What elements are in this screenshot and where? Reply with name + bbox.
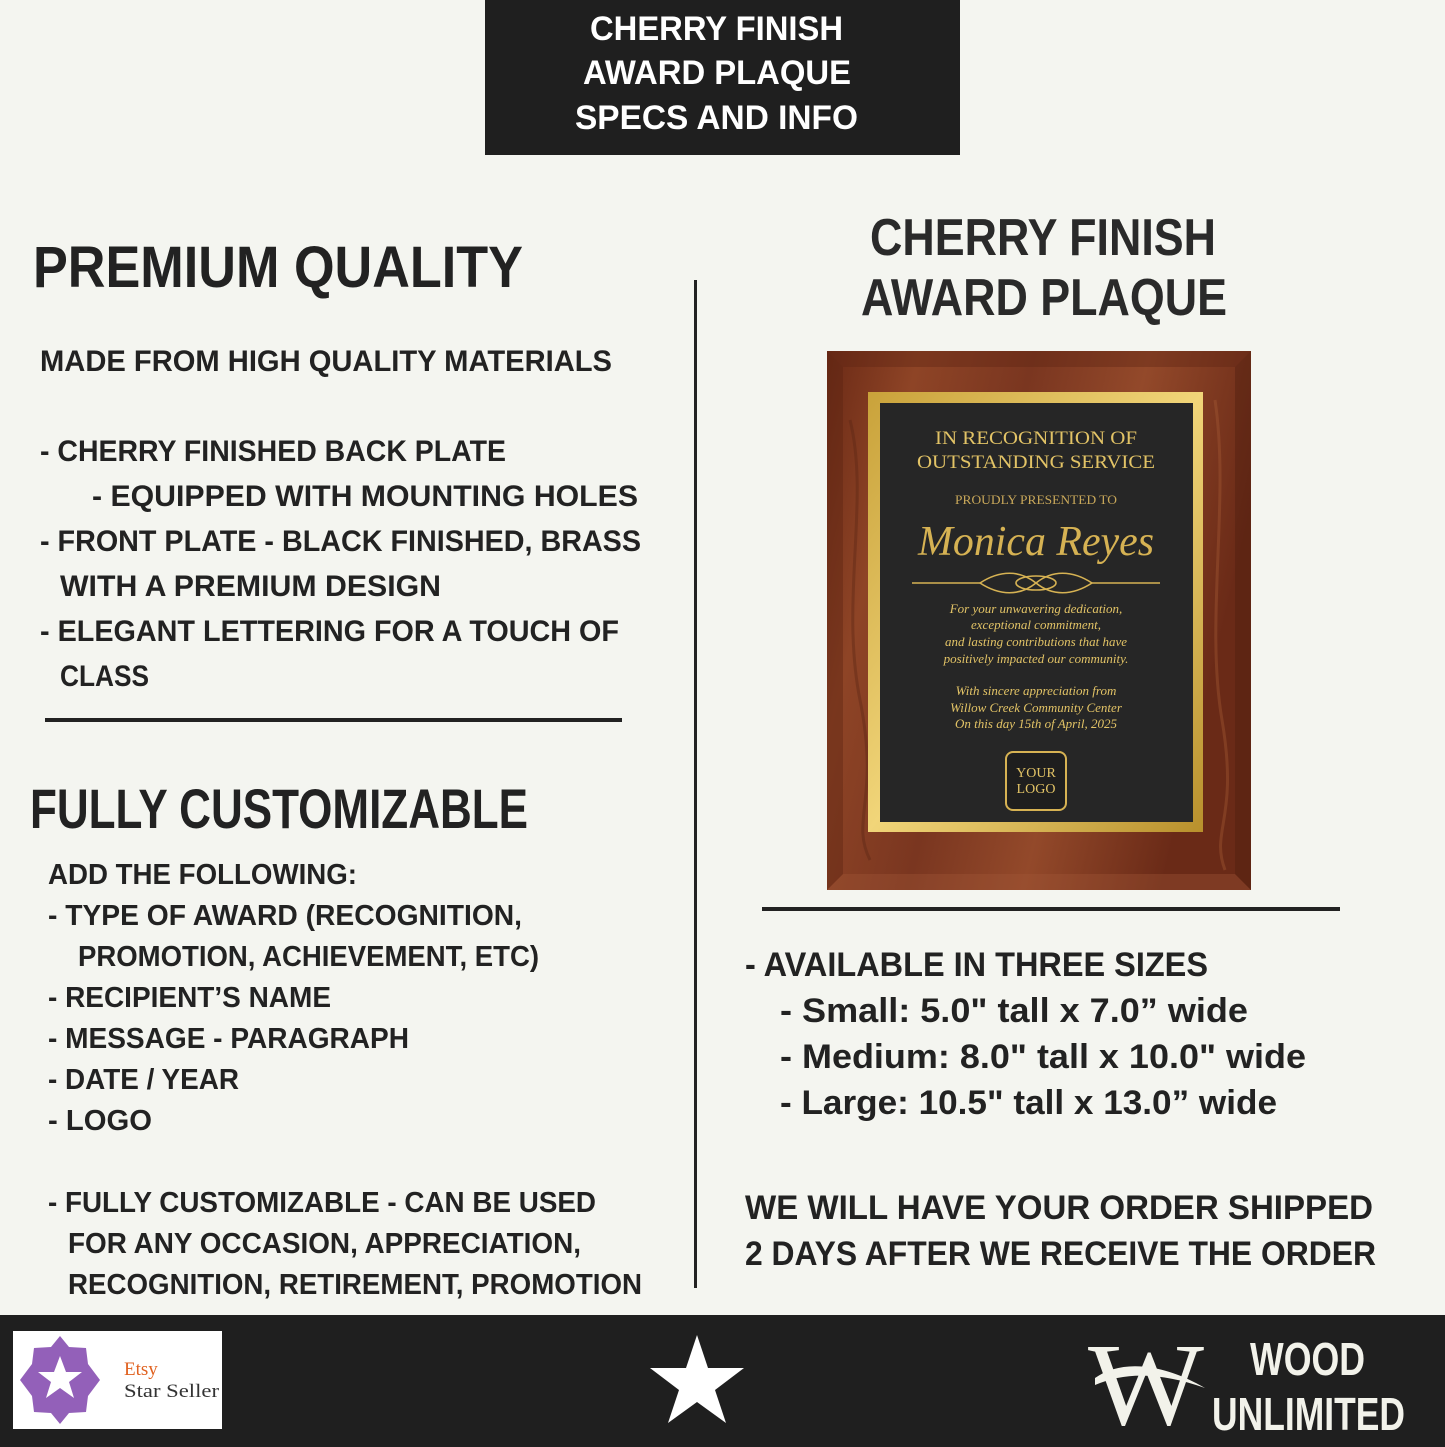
text block: premium quality list: - FRONT PLATE - BLACK FINISHED, BRASS (40, 525, 641, 558)
logo: wood unlimited: WOOD (1250, 1333, 1365, 1385)
text block: shipping: WE WILL HAVE YOUR ORDER SHIPPED (745, 1189, 1373, 1227)
text block: customization list: ADD THE FOLLOWING: (48, 859, 357, 891)
plaque image: PROUDLY PRESENTED TO (955, 492, 1117, 507)
text block: customization list: - LOGO (48, 1105, 152, 1137)
plaque image (827, 351, 1251, 890)
icon: star (650, 1335, 744, 1423)
plaque image: Willow Creek Community Center (950, 700, 1123, 715)
plaque image: and lasting contributions that have (945, 634, 1127, 649)
footer (0, 1315, 1445, 1447)
logo: wood unlimited: W (1088, 1319, 1205, 1447)
text block: premium quality list: CLASS (60, 660, 149, 693)
heading: fully customizable: FULLY CUSTOMIZABLE (30, 777, 528, 840)
text block: sizes: - AVAILABLE IN THREE SIZES (745, 946, 1208, 984)
text block: premium quality list: MADE FROM HIGH QUALITY MATERIALS (40, 345, 612, 378)
text block: sizes: - Large: 10.5" tall x 13.0” wide (780, 1084, 1277, 1122)
plaque image: YOUR (1016, 766, 1056, 781)
text block: shipping (745, 1189, 1376, 1273)
heading: product name (861, 209, 1227, 327)
text block: customization list: - TYPE OF AWARD (RECOGNITION, (48, 900, 522, 932)
text block: premium quality list: - ELEGANT LETTERING FOR A TOUCH OF (40, 615, 619, 648)
text block: premium quality list: - EQUIPPED WITH MOUNTING HOLES (92, 480, 638, 513)
badge: etsy star seller: Star Seller (124, 1381, 220, 1402)
text block: shipping: 2 DAYS AFTER WE RECEIVE THE ORDER (745, 1235, 1376, 1273)
heading: premium quality: PREMIUM QUALITY (33, 235, 523, 300)
text block: premium quality list (40, 345, 641, 693)
text block: customization list: - DATE / YEAR (48, 1064, 239, 1096)
title box: SPECS AND INFO (575, 99, 858, 137)
plaque image: With sincere appreciation from (956, 683, 1116, 698)
title box (485, 0, 960, 155)
text block: customization list: - RECIPIENT’S NAME (48, 982, 331, 1014)
title box: CHERRY FINISH (590, 10, 843, 48)
text block: sizes: - Small: 5.0" tall x 7.0” wide (780, 992, 1248, 1030)
badge: etsy star seller: Etsy (124, 1359, 158, 1380)
text block: customization list: - FULLY CUSTOMIZABLE - CAN BE USED (48, 1187, 596, 1219)
text block: customization list: - MESSAGE - PARAGRAPH (48, 1023, 409, 1055)
text block: customization list (48, 859, 642, 1301)
plaque image: positively impacted our community. (943, 651, 1128, 666)
plaque image: Monica Reyes (917, 519, 1154, 565)
text block: customization list: RECOGNITION, RETIREMENT, PROMOTION (68, 1269, 642, 1301)
text block: sizes: - Medium: 8.0" tall x 10.0" wide (780, 1038, 1306, 1076)
heading: product name: AWARD PLAQUE (861, 269, 1227, 327)
plaque image: OUTSTANDING SERVICE (917, 452, 1155, 473)
text block: premium quality list: WITH A PREMIUM DESIGN (60, 570, 441, 603)
plaque image: LOGO (1017, 782, 1055, 797)
plaque image: For your unwavering dedication, (949, 601, 1122, 616)
text block: customization list: PROMOTION, ACHIEVEMENT, ETC) (78, 941, 539, 973)
text block: sizes (745, 946, 1306, 1122)
plaque image: exceptional commitment, (971, 617, 1101, 632)
plaque image: On this day 15th of April, 2025 (955, 716, 1117, 731)
plaque image: IN RECOGNITION OF (935, 428, 1137, 449)
text block: customization list: FOR ANY OCCASION, APPRECIATION, (68, 1228, 581, 1260)
heading: product name: CHERRY FINISH (870, 209, 1216, 267)
logo: wood unlimited (1088, 1319, 1405, 1447)
badge: etsy star seller (13, 1331, 222, 1429)
text block: premium quality list: - CHERRY FINISHED BACK PLATE (40, 435, 506, 468)
title box: AWARD PLAQUE (583, 54, 851, 92)
